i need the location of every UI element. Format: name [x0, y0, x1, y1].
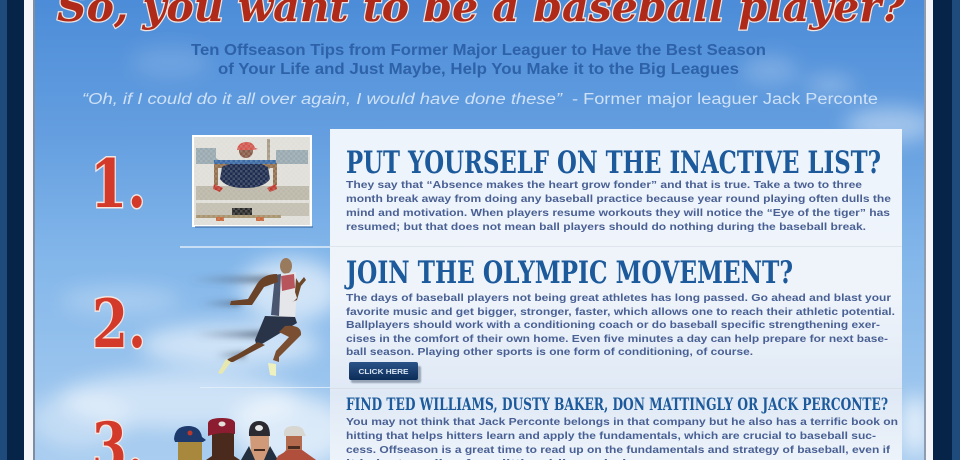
- body 2: favorite music and get bigger, stronger, faster, which allows one to reach their athletic potential.: [346, 306, 895, 318]
- button: click here: CLICK HERE: [358, 367, 408, 376]
- body 3: You may not think that Jack Perconte belongs in that company but he also has a terrific book on: [346, 416, 898, 428]
- heading 2: JOIN THE OLYMPIC MOVEMENT?: [344, 255, 793, 291]
- text panel: [180, 129, 902, 460]
- body 2: cises in the comfort of their own home. Even five minutes a day can help prepare for next base-: [346, 333, 889, 345]
- body 3: cess. Offseason is a great time to read up on the fundamentals and strategy of baseball, even if: [346, 444, 891, 456]
- body 2: Ballplayers should work with a conditioning coach or do baseball specific strengthening exer-: [346, 319, 881, 331]
- quote: [82, 91, 878, 108]
- number 2: 2.: [92, 285, 146, 363]
- body 2: The days of baseball players not being great athletes has long passed. Go ahead and blast your: [346, 292, 891, 304]
- body 1: mind and motivation. When players resume workouts they will notice the “Eye of the tiger” has: [346, 207, 890, 219]
- quote: - Former major leaguer Jack Perconte: [572, 91, 878, 108]
- quote: “Oh, if I could do it all over again, I would have done these”: [82, 91, 563, 108]
- subtitle: Ten Offseason Tips from Former Major Leaguer to Have the Best Season: [191, 42, 766, 59]
- player four: [276, 426, 316, 460]
- body 2: ball season. Playing other sports is one form of conditioning, of course.: [346, 346, 753, 358]
- four ballplayer portraits: [174, 418, 316, 460]
- number 1: 1.: [90, 145, 146, 223]
- button: click here: [349, 362, 421, 383]
- body 2: [346, 292, 895, 358]
- body 3: [346, 416, 898, 460]
- body 1: [346, 179, 891, 233]
- body 3: hitting that helps hitters learn and apply the fundamentals, which are crucial to baseball suc-: [346, 430, 877, 442]
- player one: [174, 426, 206, 460]
- body 1: They say that “Absence makes the heart grow fonder” and that is true. Take a two to three: [346, 179, 862, 191]
- runner: [190, 258, 306, 376]
- photo: player on bench: [193, 136, 313, 228]
- subtitle: of Your Life and Just Maybe, Help You Make it to the Big Leagues: [218, 61, 739, 78]
- body 1: month break away from doing any baseball practice because year round playing often dulls the: [346, 193, 891, 205]
- player two: [206, 418, 240, 460]
- body 1: resumed; but that does not mean ball players should do nothing during the baseball break.: [346, 221, 866, 233]
- player three: [241, 421, 278, 460]
- subtitle: [191, 42, 766, 78]
